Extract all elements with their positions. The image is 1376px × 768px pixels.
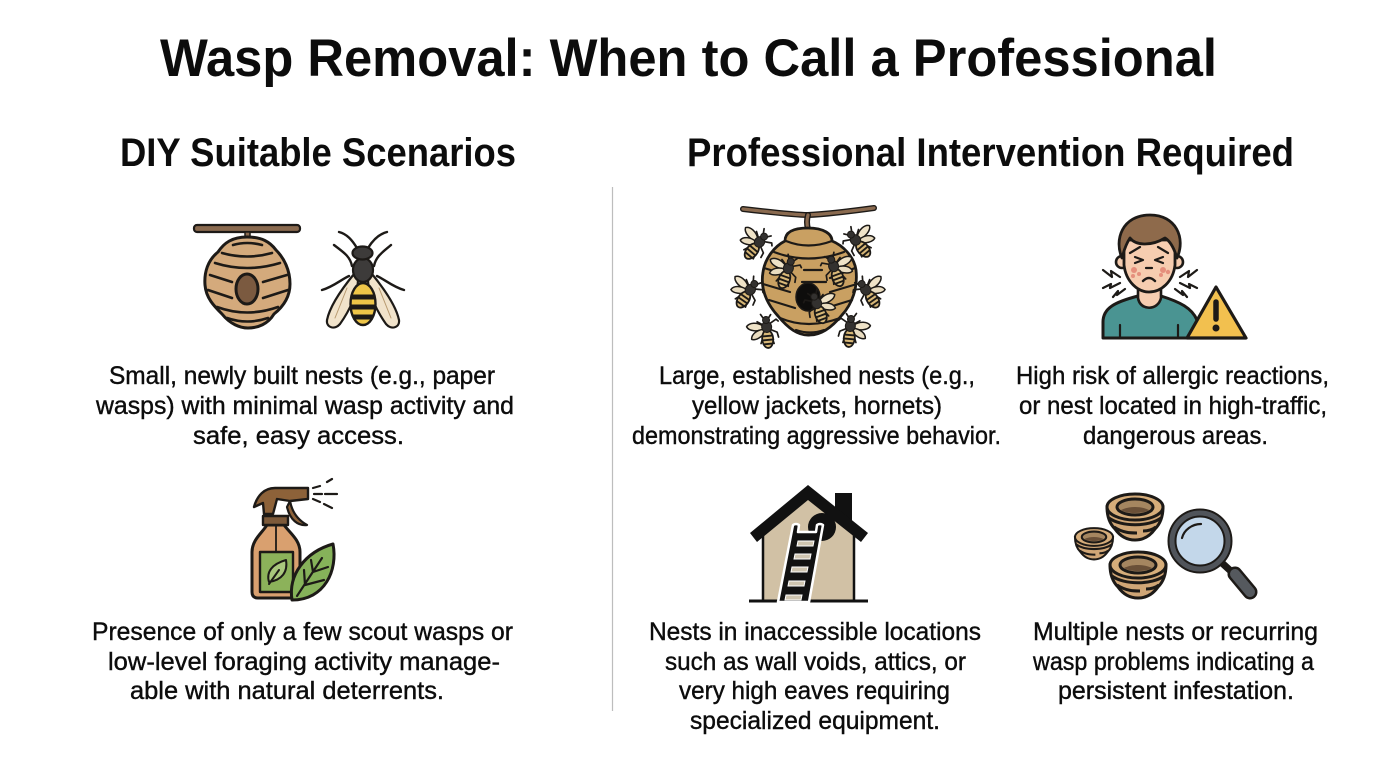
text: large nests: demonstrating aggressive behavior. xyxy=(632,422,1001,450)
text: inaccessible locations: such as wall voids, attics, or xyxy=(665,648,966,676)
panel: multiple nests xyxy=(1032,494,1318,705)
text: multiple nests: Multiple nests or recurring xyxy=(1033,618,1318,646)
text: few scouts: Presence of only a few scout wasps or xyxy=(92,618,513,646)
text: inaccessible locations xyxy=(649,618,981,735)
icon: house with ladder xyxy=(749,485,868,602)
text: small nests xyxy=(95,362,514,450)
heading: professional intervention required: Professional Intervention Required xyxy=(687,131,1294,175)
icon: nests and magnifying glass xyxy=(1075,494,1250,598)
text: few scouts: low-level foraging activity manage- xyxy=(108,648,500,676)
heading: DIY suitable scenarios: DIY Suitable Scenarios xyxy=(120,131,516,175)
text: small nests: safe, easy access. xyxy=(193,422,404,450)
panel: inaccessible locations xyxy=(649,485,981,735)
icon: wasp xyxy=(322,232,404,327)
icon: spray bottle with leaf xyxy=(252,479,337,600)
text: large nests xyxy=(632,362,1001,450)
panel: large nests xyxy=(632,208,1001,450)
text: small nests: wasps) with minimal wasp activity and xyxy=(95,392,514,420)
text: allergic risk: or nest located in high-traffic, xyxy=(1019,392,1327,420)
text: large nests: Large, established nests (e.g., xyxy=(659,362,975,390)
text: inaccessible locations: Nests in inaccessible locations xyxy=(649,618,981,646)
text: large nests: yellow jackets, hornets) xyxy=(692,392,942,420)
text: small nests: Small, newly built nests (e.g., paper xyxy=(109,362,495,390)
text: multiple nests: persistent infestation. xyxy=(1058,677,1294,705)
panel: few scouts xyxy=(92,479,513,705)
text: few scouts xyxy=(92,618,513,705)
panel: allergic risk xyxy=(1016,215,1329,450)
text: allergic risk: High risk of allergic reactions, xyxy=(1016,362,1329,390)
text: multiple nests: wasp problems indicating a xyxy=(1032,648,1314,676)
text: allergic risk: dangerous areas. xyxy=(1083,422,1268,450)
text: few scouts: able with natural deterrents. xyxy=(130,677,444,705)
icon: person with allergic reaction and warning xyxy=(1103,215,1246,338)
text: inaccessible locations: very high eaves requiring xyxy=(679,677,950,705)
text: multiple nests xyxy=(1032,618,1318,705)
text: allergic risk xyxy=(1016,362,1329,450)
icon: large nest with wasps xyxy=(722,208,894,350)
icon: small paper nest xyxy=(194,225,300,328)
text: inaccessible locations: specialized equipment. xyxy=(690,707,940,735)
title: Wasp Removal: When to Call a Professional xyxy=(160,29,1217,88)
panel: small nests xyxy=(95,225,514,450)
